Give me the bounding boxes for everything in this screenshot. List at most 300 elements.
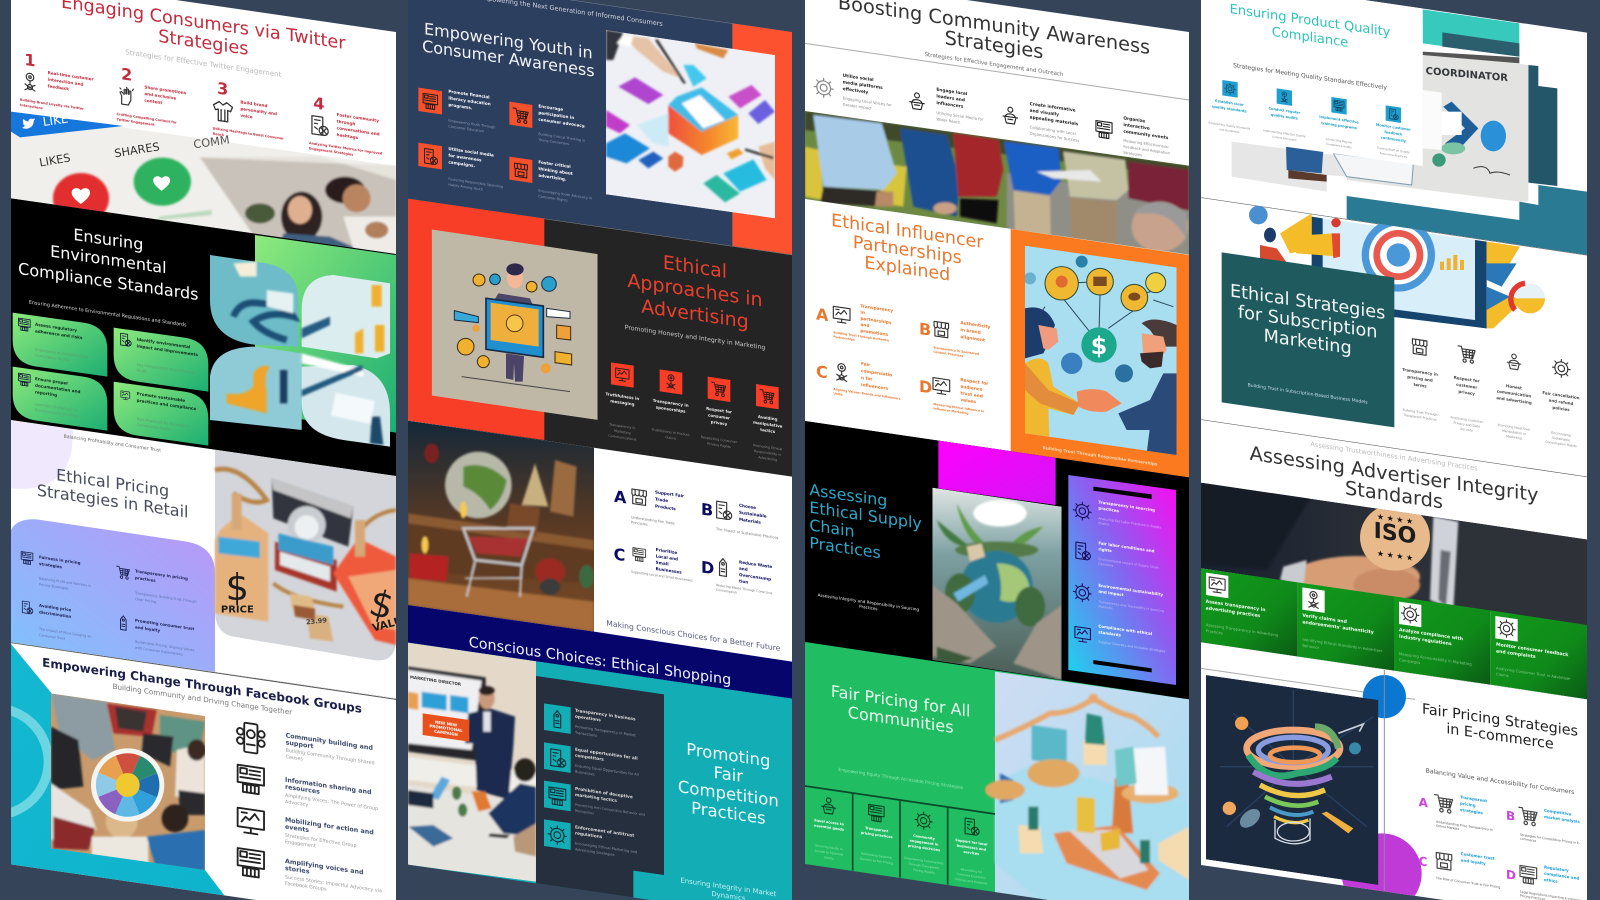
item 3: Mobilizing for action and [285, 817, 374, 837]
green backdrop [255, 235, 396, 433]
item 4: services [963, 850, 979, 856]
text: price tag: $ [226, 566, 249, 609]
item 4: and refund [1549, 398, 1573, 406]
item A: A [614, 487, 627, 508]
top bar [1093, 487, 1152, 499]
item D: Respect for [960, 378, 988, 387]
item 1: Analyzing Fair Labor Practices in Supply [1098, 516, 1161, 529]
item 2: leaders and [936, 93, 965, 103]
item 3: and visually [1030, 108, 1059, 118]
card 4: Promote sustainable [137, 391, 185, 403]
item 4: Monitor customer [1376, 123, 1411, 132]
item 3: marketing tactics [575, 792, 617, 804]
title: Standards [1345, 476, 1443, 513]
title: Strategies [158, 27, 248, 60]
subtitle: Practices [859, 604, 878, 611]
item 2 [1302, 587, 1383, 659]
item 2: Information sharing and [285, 777, 372, 796]
item 1: Equal access to [814, 818, 844, 826]
item 3: Engagement [285, 839, 316, 849]
item 2: Implementing Effective Quality [1263, 128, 1305, 138]
dark panel [536, 676, 664, 900]
title: Conscious Choices: Ethical Shopping [469, 635, 731, 689]
item A: Trade [655, 496, 668, 503]
item A: Partnerships [833, 335, 855, 342]
item B: in brand [960, 327, 981, 336]
item C: Customer trust [1461, 851, 1495, 861]
item 1: 1 [24, 50, 36, 70]
item 4: Promoting consumer trust [135, 618, 194, 631]
subtitle: Assessing Integrity and Responsibility in Sourcing [818, 592, 919, 612]
white text panel [1201, 0, 1423, 166]
item 1 [418, 88, 495, 135]
item A [816, 303, 893, 347]
item 3: Implement effective [1319, 115, 1359, 125]
title: Promoting [686, 740, 770, 771]
item 4: standards [1098, 629, 1122, 638]
item 2: Respect for [1454, 375, 1480, 384]
item 4: tactics [760, 427, 776, 434]
photo: globe in hands [932, 488, 1062, 680]
item 2: Identifying Ethical Standards in Advertiser [1302, 637, 1382, 653]
teal wedge [11, 644, 227, 898]
item 2: and exclusive [144, 91, 176, 101]
item 3 [1399, 602, 1472, 673]
item 4: Sustainable Pricing: Aligning Values [135, 640, 194, 652]
text: COMM: COMM [192, 132, 230, 151]
item D: Consumption [716, 588, 737, 595]
card 1: Compliance Audits [35, 353, 69, 362]
item 2 [116, 68, 186, 126]
item 1: Communications [608, 434, 637, 442]
item 4 [544, 819, 637, 860]
item 2: Behavior [1302, 643, 1320, 650]
text: LIKES: LIKES [38, 150, 71, 170]
item 1: Pricing Strategies [39, 582, 69, 591]
item 4: Consumer Rights [538, 194, 568, 203]
item 1: Marketing [614, 429, 631, 435]
text: dollar: $ [1091, 332, 1107, 360]
title: in E-commerce [1446, 721, 1554, 753]
text: star ring lower: ★ ★ ★ ★ [1377, 549, 1413, 563]
item 1: practices [1098, 505, 1120, 513]
item 2 [238, 765, 378, 819]
item 4: Claims [1496, 671, 1509, 678]
item 2: Ensuring Equal Opportunities for All [575, 764, 639, 777]
item 2: resources [285, 784, 320, 796]
panel: Ensuring Product Quality Compliance [1200, 0, 1600, 300]
item 2: Transparency: Building Trust Through [135, 591, 197, 604]
item 4: Advocating for [960, 867, 982, 874]
title: Assessing Advertiser Integrity [1250, 442, 1538, 507]
item 3: training programs [1321, 121, 1357, 130]
card 2 [114, 328, 208, 392]
item C: Small [656, 560, 669, 567]
item C: Unite [833, 391, 842, 397]
item 1 [1073, 499, 1161, 534]
item 3: Collaborating with Local [1030, 124, 1076, 136]
item 4: continuously [1381, 136, 1407, 143]
text: promo: NEW NEW [435, 719, 457, 728]
item 3: and impact [1098, 589, 1124, 597]
item 1: Empowering Youth Through [448, 119, 495, 130]
item 3: Respecting Consumer [701, 435, 737, 444]
item 2 [116, 566, 196, 604]
item B: market analysis [1544, 814, 1580, 824]
item 1: Balancing Profit and Fairness in [39, 576, 91, 588]
text: promo: CAMPAIGN [434, 729, 458, 737]
title band [408, 605, 792, 699]
item 1 [605, 362, 639, 442]
item 2: participation in [538, 110, 574, 120]
item 2: Advocacy [285, 799, 308, 808]
bottom bar [1093, 660, 1152, 672]
item 3: Campaigns [1399, 657, 1420, 665]
item D: D [919, 377, 932, 398]
subtitle: Strategies for Meeting Quality Standards Effectively [1233, 62, 1387, 92]
subtitle: Balancing Profitability and Consumer Trust [64, 434, 161, 454]
item 1: Transparency in business [575, 709, 636, 722]
panel: Engaging Consumers via Twitter [11, 0, 396, 254]
item 3: Avoiding price [39, 603, 71, 612]
card 1: Importance of Environmental [35, 348, 88, 359]
title: Ensuring [73, 225, 143, 254]
item A: in [860, 310, 865, 316]
item A: promotions [860, 328, 889, 338]
photo: balance scale [985, 672, 1189, 900]
item 2: Businesses [575, 770, 595, 777]
title: Practices [691, 798, 766, 828]
item 1: Practices [1206, 628, 1223, 635]
item 2: Encourage [538, 103, 563, 112]
item 2 [509, 102, 586, 148]
item 3: Reach [213, 132, 225, 137]
item 3: appealing materials [1030, 114, 1079, 127]
item 1: Transparency in [609, 422, 635, 430]
subtitle: Building Community and Driving Change Together [113, 682, 292, 717]
cell grid [805, 786, 995, 885]
item 3 [22, 601, 91, 645]
item 3: campaigns. [448, 159, 475, 168]
item 4: Enforcement of antitrust [575, 825, 634, 839]
item D: and [739, 566, 748, 572]
orange panel [1011, 229, 1189, 480]
subtitle: Balancing Value and Accessibility for Consumers [1426, 768, 1574, 796]
item 1: and Guidelines [1219, 127, 1240, 134]
item 3: Empowering Communities [904, 856, 944, 866]
item C: n for [861, 375, 873, 383]
purple circle [1342, 833, 1422, 900]
photo: community group holding papers [805, 111, 1189, 257]
subtitle: Making Conscious Choices for a Better Future [606, 619, 781, 653]
item 3: for awareness [448, 153, 482, 163]
subtitle: Ensuring Integrity in Market [680, 876, 776, 898]
item 2: Utilizing Social Media for [936, 110, 983, 122]
item B: B [1506, 808, 1515, 824]
photo: isometric design box [606, 30, 775, 218]
title: Environmental [50, 242, 167, 277]
photo: globe and cart on shelf [408, 421, 594, 632]
title: Ethical Pricing [56, 465, 169, 501]
panel: Conscious Choices: Ethical Shopping [400, 410, 833, 743]
panel: Assessing Ethical Supply Chain Practices [800, 410, 1233, 743]
illustration: marketing funnel [1206, 675, 1378, 885]
card 2: impact and improvements [137, 343, 198, 357]
item 3: communication [1497, 389, 1531, 399]
card 2: Key Components of an Effective [137, 363, 195, 375]
item A: pricing [1460, 801, 1476, 808]
illustration: marketing target and megaphone [1249, 206, 1545, 328]
item 2: Engage local [936, 88, 967, 97]
item 3: Build brand [240, 99, 267, 108]
item 2 [1450, 346, 1484, 434]
item 1: essential goods [814, 824, 844, 832]
item 4 [1096, 115, 1171, 162]
item 4: stories [285, 865, 310, 876]
item 1: literacy education [448, 95, 491, 106]
item 2: Transparency in pricing [135, 568, 188, 581]
panel: Fair Pricing Strategies in E-commerce [1200, 617, 1600, 900]
item 2: competitors [575, 753, 604, 763]
item 2: Share promotions [144, 84, 186, 95]
card 3: documentation and [35, 383, 81, 394]
card 4: Best Practices for Successful [137, 417, 189, 429]
item 1 [20, 54, 94, 110]
item 3: Conducting Regular [1326, 137, 1352, 145]
item 3: voice [240, 113, 253, 119]
item A [614, 487, 685, 531]
text: LIKE: LIKE [42, 112, 69, 129]
item 1: Chains [1098, 521, 1109, 527]
item 3: and advertising [1496, 395, 1532, 405]
item 4: Encouraging Ethical Marketing and [575, 841, 637, 854]
item 1 [814, 73, 892, 114]
item 4 [1075, 623, 1166, 653]
item 1: Transparency in [1402, 367, 1438, 377]
item 3: Materials [1098, 604, 1113, 610]
item 2: Addressing Systemic [861, 851, 892, 860]
title: Fair Pricing Strategies [1422, 701, 1578, 740]
item 1: Transactions [574, 731, 597, 738]
card 3: reporting [35, 389, 57, 398]
item 1: effectively [843, 86, 868, 96]
item 2: Equal opportunities for all [575, 748, 638, 762]
item D: trust and [960, 390, 983, 400]
item 1: Real-time customer [48, 70, 94, 82]
item 1: Goods [824, 855, 834, 861]
item B: Materials [739, 517, 761, 525]
item 2: Environmental Impact of Supply Chain [1098, 557, 1159, 570]
item C: Businesses [656, 566, 682, 575]
item 4: hashtags [337, 132, 359, 140]
card 4: Compliance Audits [137, 423, 171, 432]
item A: Online Markets [1436, 824, 1460, 831]
item A: Transparent [1460, 794, 1487, 803]
item 2: endorsements' authenticity [1302, 619, 1374, 636]
item 4: and complaints [1496, 648, 1536, 660]
item 1: Access to Essential [815, 849, 843, 857]
panel: Boosting Community Awareness Strategies [800, 0, 1233, 300]
illustration: handshake partnership [1024, 246, 1177, 457]
item 4: Monitor consumer feedback [1496, 643, 1568, 658]
item C: Local and [656, 553, 678, 562]
item 3: Utilize social media [448, 146, 494, 158]
item 3: 3 [217, 79, 228, 99]
item 2: Prioritizing Customer [1450, 415, 1483, 424]
item 4: Responsibility in [754, 449, 781, 457]
item 2 [544, 742, 639, 783]
ring decoration [0, 708, 48, 815]
quote marks decoration [1233, 0, 1265, 30]
item 4: 4 [313, 93, 325, 114]
illustration: person with tablet [432, 229, 598, 420]
item D: Overconsump [739, 572, 771, 582]
item D: Reducing Waste Through Conscious [716, 583, 772, 595]
item 2: Young Consumers [538, 138, 569, 146]
item 3 [418, 143, 503, 195]
item 3: industry regulations [1399, 634, 1452, 647]
title: Consumer Awareness [422, 37, 595, 81]
item A: A [1419, 795, 1429, 810]
item 4: Measuring Effectiveness: [1123, 139, 1169, 149]
text: ISO badge: ISO [1374, 518, 1416, 550]
item 4: Foster critical [538, 159, 571, 169]
item 2: sponsorships [656, 405, 686, 414]
item 4: conversations and [337, 125, 380, 137]
item 2: Control Processes [1272, 135, 1297, 142]
item C: influencers [861, 382, 888, 392]
item 4: Foster community [337, 112, 379, 123]
item 3: Manipulation in [1502, 429, 1526, 436]
card 3 [13, 367, 107, 431]
item 3: Monopolies [575, 809, 594, 815]
subtitle: Assessing Trustworthiness in Advertising Practices [1310, 440, 1478, 473]
item A: A [816, 304, 829, 325]
item 3: Compliance Audits [1326, 142, 1352, 150]
item 1: Causes [286, 754, 303, 763]
item A [1419, 794, 1493, 836]
item 3 [1496, 353, 1532, 442]
item 4: businesses and [957, 844, 987, 852]
item 4: Supplier Diversity and Inclusion Strategies [1098, 640, 1166, 653]
item 4 [1495, 616, 1571, 687]
item C: Fair [861, 362, 870, 368]
item A: partnerships [860, 316, 892, 326]
item B: B [701, 499, 713, 520]
item 4 [309, 97, 382, 156]
item 1 [21, 551, 91, 594]
text: SHARES: SHARES [113, 139, 161, 160]
item 1: Transparent Practices [1402, 413, 1437, 422]
title: Practices [809, 533, 881, 562]
text: price block: 23.99 [306, 616, 328, 626]
item 1: Engaging Local Voices for [843, 95, 892, 107]
title: Partnerships [853, 233, 962, 269]
item 4: Training Staff on Quality [1377, 146, 1410, 154]
item D [919, 377, 989, 418]
item 3 [238, 808, 374, 855]
item A: strategies [1460, 807, 1483, 815]
title: Compliance Standards [18, 259, 198, 304]
item 3: engagement in [910, 839, 939, 847]
item 4: Promoting Ethical [753, 443, 782, 451]
item 3 [1073, 583, 1164, 618]
icon: bird [23, 119, 34, 128]
item C: Aligning Values: Brands and Influencers [833, 387, 901, 401]
panel: Ethical Approaches in Advertising [400, 167, 833, 500]
panel: Empowering Change Through Facebook Groups [0, 617, 433, 900]
item 4: interactive [1123, 122, 1150, 132]
item 4 [1542, 358, 1580, 448]
item A: Support Fair [655, 489, 684, 499]
item 4: through [337, 119, 355, 126]
item 4: community events [1123, 129, 1169, 141]
title: Ethical [663, 251, 727, 283]
item 1: pricing and [1407, 374, 1433, 383]
item B [701, 499, 779, 540]
title: Chain [809, 515, 855, 541]
item 2 [910, 87, 984, 128]
item 4: Amplifying voices and [285, 858, 364, 876]
green band cells [1201, 568, 1587, 699]
item 1: Establish clear [1215, 99, 1244, 107]
title card [1222, 252, 1394, 427]
item A: Products [655, 503, 676, 511]
title: Ensuring Product Quality [1230, 2, 1390, 40]
item 3: Habits Among Youth [448, 183, 483, 192]
orange block [408, 199, 544, 440]
item 1: Promoting Transparency in Market [575, 725, 636, 738]
item 2: Conduct regular [1269, 106, 1300, 115]
card 3: Environmental Auditing [35, 408, 78, 418]
item 3 [904, 811, 944, 876]
item 2: Claims [665, 435, 677, 441]
item A: Understanding Price Transparency in [1436, 820, 1493, 832]
item A: Principles [631, 520, 648, 527]
photo: price tags and camera [215, 450, 404, 660]
item 1: advertising practices [1206, 605, 1261, 619]
item 4: Facebook Groups [285, 881, 327, 893]
item C: compensatio [861, 368, 892, 379]
right strip [1528, 65, 1557, 186]
orange strip [732, 23, 792, 257]
item 1: Transparency in sourcing [1098, 499, 1155, 513]
item A: Understanding Fair Trade [631, 515, 675, 526]
item 2: rights [1098, 546, 1112, 553]
item 3 [212, 82, 284, 140]
subtitle: Ensuring Adherence to Environmental Regulations and Standards [29, 300, 187, 329]
item 3 [701, 377, 738, 450]
item 4: Analyzing Twitter Metrics for Improved [309, 141, 382, 156]
item D: Regulatory [1544, 864, 1569, 873]
item 2: Security [1460, 427, 1473, 433]
item B [919, 319, 991, 360]
item D: Influencer Marketing [933, 406, 968, 415]
item D: tion [739, 578, 748, 585]
item 3: Organizations for Success [1030, 131, 1079, 143]
item 2: pricing practices [861, 831, 893, 839]
item B: commerce [1520, 837, 1536, 843]
item 2: Crafting Compelling Content for [117, 112, 177, 125]
item B: The Impact of Sustainable Practices [715, 527, 779, 540]
item 1: support [286, 739, 313, 750]
panel: Fair Pricing for All Communities [800, 617, 1233, 900]
item 3: Create informative [1030, 102, 1076, 114]
item B [1506, 807, 1580, 849]
title: Compliance [1272, 25, 1348, 51]
title: Ethical Supply [809, 498, 922, 533]
item 2: practices [135, 575, 156, 583]
